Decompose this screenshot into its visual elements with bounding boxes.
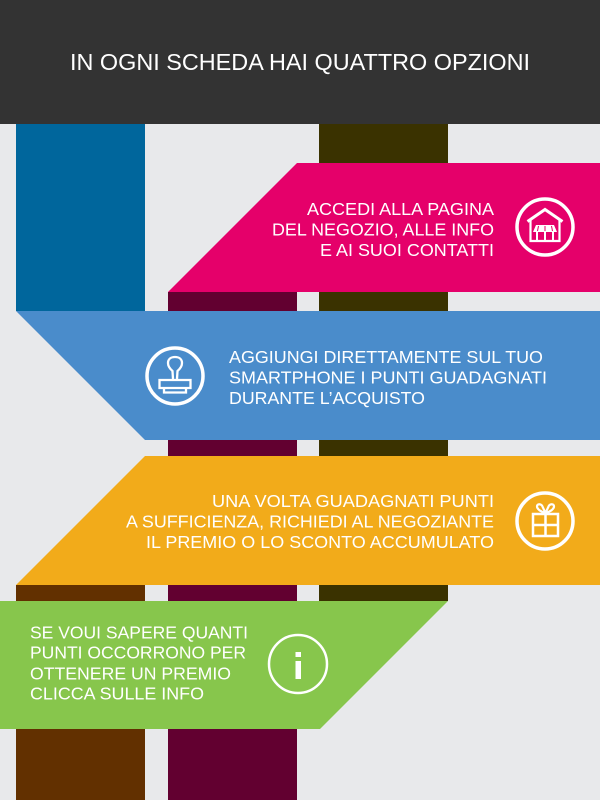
text: stamp points [229,347,547,408]
icon: stamp [147,348,203,404]
icon: store [517,199,573,255]
header band with title [0,0,600,124]
text: info: OTTENERE UN PREMIO [30,664,231,684]
text: redeem reward: IL PREMIO O LO SCONTO ACCUMULATO [146,532,494,552]
panel: info [0,601,448,729]
panel: stamp points [16,311,600,440]
text: redeem reward: A SUFFICIENZA, RICHIEDI AL NEGOZIANTE [126,512,494,532]
text: info: SE VOUI SAPERE QUANTI [30,622,248,642]
text: store info: ACCEDI ALLA PAGINA [307,199,494,219]
text: info [30,622,248,704]
ribbon: blue column [16,124,145,311]
text: redeem reward: UNA VOLTA GUADAGNATI PUNTI [212,491,494,511]
text: stamp points: AGGIUNGI DIRETTAMENTE SUL TUO [229,347,543,367]
ribbon: brown column [16,585,145,800]
ribbon: olive column [319,124,448,601]
icon: gift [517,493,573,549]
text: info: CLICCA SULLE INFO [30,684,204,704]
ribbon: maroon column [168,292,297,800]
icon: info [269,635,327,693]
text: stamp points: SMARTPHONE I PUNTI GUADAGNATI [229,368,547,388]
panel: store info [168,163,600,292]
text: redeem reward [126,491,494,552]
text: store info: E AI SUOI CONTATTI [320,240,494,260]
text: stamp points: DURANTE L’ACQUISTO [229,388,425,408]
title: IN OGNI SCHEDA HAI QUATTRO OPZIONI [70,49,530,75]
text: info: PUNTI OCCORRONO PER [30,642,246,662]
text: store info: DEL NEGOZIO, ALLE INFO [272,220,494,240]
text: store info [272,199,494,260]
panel: redeem reward [16,456,600,585]
